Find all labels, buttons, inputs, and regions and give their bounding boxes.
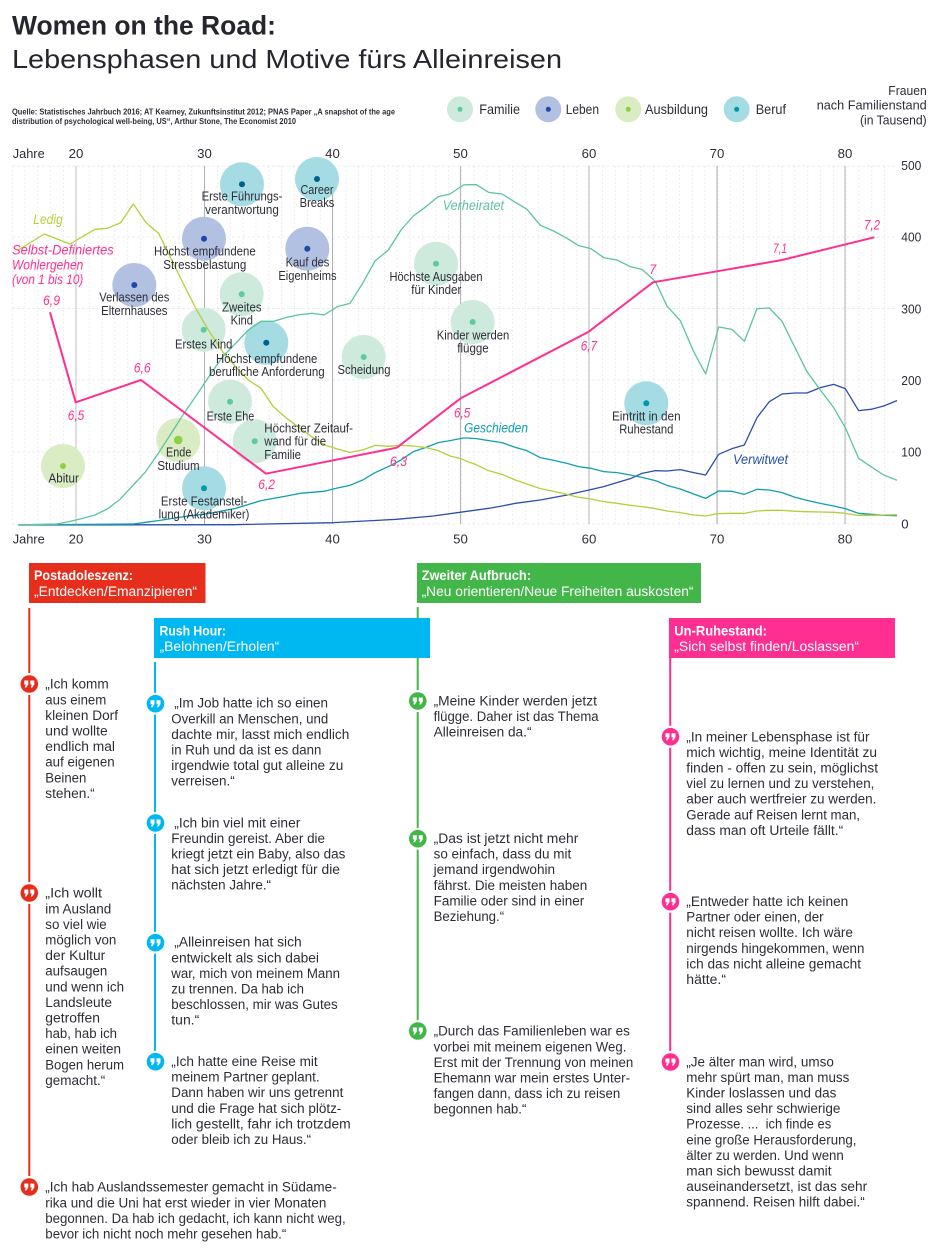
- quote pink 3: auseinandersetzt, ist das sehr: [686, 1179, 867, 1195]
- line: Ledig: [18, 204, 897, 516]
- quote blue 4: Dann haben wir uns getrennt: [171, 1085, 343, 1101]
- quote blue 1: in Ruh und da ist es dann: [171, 742, 321, 758]
- quote green 3: [434, 1024, 633, 1118]
- wellbeing values: 6,9: [43, 293, 60, 308]
- wellbeing values: [43, 217, 880, 492]
- milestone labels: Ruhestand: [619, 422, 673, 437]
- milestone labels: Höchst empfundene: [216, 351, 317, 366]
- quote red 2: getroffen: [45, 1010, 100, 1026]
- wellbeing values: 6,7: [581, 338, 597, 353]
- quote pink 2: hätte.“: [686, 972, 726, 988]
- milestone labels: Eintritt in den: [612, 409, 681, 424]
- quote red 2: [45, 886, 124, 1089]
- quote blue 3: [170, 935, 340, 1029]
- panel: Postadoleszenz heading: „Entdecken/Emanzipieren“: [34, 584, 197, 600]
- bottom age axis: 40: [325, 531, 340, 546]
- right axis title: (in Tausend): [860, 112, 927, 127]
- quote blue 3: war, mich von meinem Mann: [170, 966, 340, 982]
- panel: Postadoleszenz heading: [29, 563, 206, 603]
- quote blue 2: nächsten Jahre.“: [171, 878, 271, 894]
- quote red 1: [45, 677, 118, 802]
- quote green 3: vorbei mit meinem eigenen Weg.: [434, 1039, 626, 1055]
- quote red 2: hab, hab ich: [45, 1026, 117, 1042]
- right value axis: 100: [901, 445, 921, 460]
- series labels: Ledig: [33, 212, 63, 227]
- right value axis: 400: [901, 230, 921, 245]
- icon: quote blue 2: [144, 812, 166, 834]
- milestone labels: Erstes Kind: [175, 336, 232, 351]
- title: Women on the Road:: [12, 10, 276, 40]
- subtitle: Lebensphasen und Motive fürs Alleinreisen: [12, 44, 562, 74]
- quote pink 1: finden - offen zu sein, möglichst: [686, 760, 878, 776]
- milestone labels: Kind: [231, 313, 253, 328]
- wellbeing values: 7: [649, 262, 657, 277]
- bottom age axis: 20: [69, 531, 83, 546]
- quote blue 3: tun.“: [171, 1013, 200, 1029]
- top age axis: 20: [69, 146, 83, 161]
- top age axis: 50: [453, 146, 468, 161]
- legend: [447, 96, 786, 122]
- quote pink 3: spannend. Reisen hilft dabei.“: [686, 1195, 865, 1211]
- series labels: [33, 198, 789, 467]
- quote red 3: [45, 1180, 346, 1242]
- quote blue 4: oder bleib ich zu Haus.“: [171, 1132, 311, 1148]
- legend: Ausbildung: [645, 102, 708, 117]
- quote red 1: und wollte: [45, 724, 108, 740]
- milestone labels: Höchster Zeitauf-: [264, 421, 353, 436]
- quote red 2: Landsleute: [45, 995, 112, 1011]
- quote red 2: aufsaugen: [45, 964, 107, 980]
- milestone labels: Career: [300, 182, 334, 197]
- icon: quote blue 4: [144, 1051, 166, 1073]
- quote blue 3: beschlossen, mir was Gutes: [171, 997, 338, 1013]
- milestone labels: Erste Ehe: [207, 408, 254, 423]
- series labels: Verheiratet: [443, 198, 505, 213]
- wellbeing values: 6,6: [134, 360, 151, 375]
- quote pink 1: viel zu lernen und zu verstehen,: [686, 776, 874, 792]
- right value axis: 500: [901, 158, 921, 173]
- series labels: Geschieden: [464, 421, 528, 436]
- quote blue 4: und die Frage hat sich plötz-: [171, 1101, 342, 1117]
- panel: Un-Ruhestand heading: Un-Ruhestand:: [674, 622, 767, 638]
- quote pink 2: ich das nicht alleine gemacht: [686, 956, 861, 972]
- top age axis: 70: [710, 146, 724, 161]
- quote blue 1: [171, 696, 349, 790]
- quote red 2: einen weiten: [45, 1042, 121, 1058]
- quote pink 1: Gerade auf Reisen lernt man,: [686, 807, 860, 823]
- quote green 2: Beziehung.“: [434, 909, 504, 925]
- milestone labels: flügge: [457, 341, 489, 356]
- quote blue 2: [171, 815, 345, 894]
- panel: Zweiter Aufbruch heading: [417, 563, 701, 603]
- quote green 1: „Meine Kinder werden jetzt: [434, 693, 597, 709]
- quote pink 3: man sich bewusst damit: [686, 1164, 832, 1180]
- wellbeing label: [12, 243, 114, 287]
- quote blue 3: zu trennen. Da hab ich: [171, 982, 304, 998]
- quote red 3: „Ich hab Auslandssemester gemacht in Südame-: [45, 1180, 337, 1196]
- wellbeing values: 6,5: [68, 408, 85, 423]
- icon: quote green 3: [407, 1020, 429, 1042]
- icon: quote pink 3: [660, 1051, 682, 1073]
- quote red 2: „Ich wollt: [45, 886, 102, 902]
- right value axis: [901, 158, 921, 531]
- quote red 1: endlich mal: [45, 739, 115, 755]
- icon: quote blue 1: [144, 693, 166, 715]
- quote pink 3: eine große Herausforderung,: [686, 1132, 856, 1148]
- quote red 2: der Kultur: [45, 948, 106, 964]
- quote red 1: kleinen Dorf: [45, 708, 118, 724]
- icon: quote red 1: [18, 673, 40, 695]
- milestone labels: Familie: [264, 447, 301, 462]
- icon: quote red 2: [18, 882, 40, 904]
- wellbeing values: 7,2: [864, 217, 880, 232]
- wellbeing label: (von 1 bis 10): [12, 272, 83, 287]
- quote blue 4: „Ich hatte eine Reise mit: [171, 1054, 318, 1070]
- quote pink 3: Prozesse. ... ich finde es: [686, 1117, 831, 1133]
- bottom age axis: 50: [453, 531, 468, 546]
- panel: Rush Hour heading: „Belohnen/Erholen“: [160, 639, 280, 655]
- panel: Rush Hour heading: Rush Hour:: [160, 622, 226, 638]
- panel: Postadoleszenz heading: Postadoleszenz:: [34, 567, 133, 583]
- line: Verwitwet: [18, 384, 897, 525]
- icon: quote green 2: [407, 828, 429, 850]
- quote green 1: [434, 693, 599, 740]
- milestone labels: Scheidung: [338, 362, 390, 377]
- timeline lines: [29, 607, 670, 1187]
- milestone labels: Studium: [157, 458, 200, 473]
- wellbeing values: 7,1: [773, 241, 787, 256]
- quote green 2: Familie oder sind in einer: [434, 893, 584, 909]
- icon: quote pink 2: [660, 891, 682, 913]
- quote blue 4: meinem Partner geplant.: [171, 1070, 320, 1086]
- milestone labels: Erste Festanstel-: [161, 494, 247, 509]
- quote blue 2: „Ich bin viel mit einer: [174, 815, 301, 831]
- panel: Un-Ruhestand heading: [669, 618, 895, 658]
- quote green 3: Ehemann war mein erstes Unter-: [434, 1070, 630, 1086]
- quote blue 2: hat sich jetzt erledigt für die: [171, 862, 340, 878]
- quote green 2: fährst. Die meisten haben: [434, 878, 587, 894]
- quote red 2: im Ausland: [45, 901, 111, 917]
- panel: Zweiter Aufbruch heading: Zweiter Aufbruch:: [422, 567, 531, 583]
- quote pink 1: mich wichtig, meine Identität zu: [686, 745, 877, 761]
- quote green 2: [433, 831, 587, 925]
- milestone labels: Kauf des: [286, 255, 330, 270]
- source note: [12, 106, 395, 126]
- quote red 1: „Ich komm: [45, 677, 109, 693]
- quote green 2: so einfach, dass du mit: [434, 847, 571, 863]
- line: Wohlergehen: [50, 237, 874, 474]
- quote blue 3: entwickelt als sich dabei: [171, 950, 319, 966]
- quote blue 1: dachte mir, lasst mich endlich: [171, 727, 349, 743]
- quote blue 3: „Alleinreisen hat sich: [174, 935, 302, 951]
- right value axis: 0: [901, 516, 909, 531]
- line: Verheiratet: [18, 185, 897, 525]
- quote red 1: Beinen: [45, 770, 86, 786]
- quote blue 2: kriegt jetzt ein Baby, also das: [171, 846, 345, 862]
- milestone labels: Breaks: [300, 195, 335, 210]
- bottom age axis: 60: [582, 531, 596, 546]
- quote blue 2: Freundin gereist. Aber die: [171, 831, 325, 847]
- top age axis: 60: [582, 146, 596, 161]
- quote pink 2: „Entweder hatte ich keinen: [686, 894, 848, 910]
- bottom age axis: 30: [197, 531, 212, 546]
- milestone labels: Kinder werden: [437, 327, 509, 342]
- top age axis: [13, 146, 852, 161]
- milestone labels: Abitur: [49, 470, 79, 485]
- bottom age axis: [13, 531, 852, 546]
- source note: Quelle: Statistisches Jahrbuch 2016; AT Kearney, Zukunftsinstitut 2012; PNAS Paper „A snapshot of the age: [12, 106, 395, 116]
- quote red 3: bevor ich nicht noch mehr gesehen hab.“: [45, 1226, 287, 1242]
- quote pink 3: [686, 1054, 867, 1211]
- quote pink 1: [686, 729, 878, 839]
- quote green 1: Alleinreisen da.“: [434, 724, 532, 740]
- quote green 3: Erst mit der Trennung von meinen: [434, 1055, 633, 1071]
- legend: Leben: [566, 102, 599, 117]
- milestone circles: [41, 157, 668, 510]
- milestone labels: Höchst empfundene: [154, 244, 256, 259]
- quote blue 1: verreisen.“: [171, 774, 235, 790]
- quote red 2: so viel wie: [45, 917, 107, 933]
- quote pink 2: nicht reisen wollte. Ich wäre: [686, 925, 853, 941]
- quote red 2: möglich von: [45, 932, 116, 948]
- quote green 3: begonnen hab.“: [434, 1102, 527, 1118]
- milestone labels: Eigenheims: [278, 268, 337, 283]
- icon: quote blue 3: [144, 932, 166, 954]
- bottom age axis: 80: [838, 531, 852, 546]
- quote pink 3: älter zu werden. Und wenn: [686, 1148, 844, 1164]
- quote red 1: auf eigenen: [45, 755, 115, 771]
- icon: quote pink 1: [660, 726, 682, 748]
- quote red 1: aus einem: [45, 692, 106, 708]
- quote green 2: jemand irgendwohin: [433, 862, 555, 878]
- quote green 1: flügge. Daher ist das Thema: [434, 709, 599, 725]
- top age axis: 30: [197, 146, 212, 161]
- milestone labels: Erste Führungs-: [202, 189, 282, 204]
- milestone labels: verantwortung: [205, 202, 279, 217]
- icon: quote red 3: [18, 1176, 40, 1198]
- top age axis: 80: [838, 146, 852, 161]
- right value axis: 300: [901, 301, 921, 316]
- line: Geschieden: [18, 438, 897, 525]
- quote pink 1: dass man oft Urteile fällt.“: [686, 823, 843, 839]
- quote red 3: rika und die Uni hat erst wieder in vier Monaten: [45, 1195, 326, 1211]
- milestone labels: lung (Akademiker): [159, 507, 249, 522]
- quote pink 2: nirgends hingekommen, wenn: [686, 941, 864, 957]
- panel: Rush Hour heading: [154, 618, 430, 658]
- milestone labels: für Kinder: [411, 282, 462, 297]
- quote blue 1: „Im Job hatte ich so einen: [174, 696, 328, 712]
- quote pink 3: „Je älter man wird, umso: [686, 1054, 834, 1070]
- right value axis: 200: [901, 373, 921, 388]
- quote pink 2: Partner oder einen, der: [686, 910, 824, 926]
- wellbeing label: Wohlergehen: [12, 257, 83, 272]
- quote blue 1: irgendwie total gut alleine zu: [171, 758, 343, 774]
- wellbeing values: 6,3: [390, 454, 407, 469]
- quote pink 3: mehr spürt man, man muss: [686, 1070, 849, 1086]
- wellbeing label: Selbst-Definiertes: [12, 243, 114, 258]
- quote blue 4: [171, 1054, 351, 1148]
- quote red 2: gemacht.“: [45, 1073, 106, 1089]
- quote red 2: Bogen herum: [45, 1057, 124, 1073]
- quote blue 4: lich gestellt, fahr ich trotzdem: [171, 1116, 351, 1132]
- panel: Un-Ruhestand heading: „Sich selbst finden/Loslassen“: [674, 639, 859, 655]
- panel: Zweiter Aufbruch heading: „Neu orientieren/Neue Freiheiten auskosten“: [422, 584, 694, 600]
- legend: Beruf: [756, 102, 786, 117]
- milestone labels: berufliche Anforderung: [209, 364, 325, 379]
- milestone labels: wand für die: [263, 434, 326, 449]
- wellbeing values: 6,2: [258, 477, 275, 492]
- milestone dots: [60, 176, 649, 491]
- wellbeing values: 6,5: [454, 405, 471, 420]
- milestone labels: Elternhauses: [101, 303, 168, 318]
- bottom age axis: Jahre: [13, 531, 45, 546]
- quote pink 1: aber auch wertfreier zu werden.: [686, 792, 876, 808]
- series labels: Verwitwet: [733, 452, 789, 467]
- milestone labels: Zweites: [222, 299, 262, 314]
- right axis title: Frauen: [888, 83, 927, 98]
- source note: distribution of psychological well-being, US“, Arthur Stone, The Economist 2010: [12, 116, 296, 126]
- quote red 2: und wenn ich: [45, 979, 124, 995]
- top age axis: 40: [325, 146, 340, 161]
- milestone labels: Stressbelastung: [163, 257, 246, 272]
- right axis title: nach Familienstand: [817, 98, 927, 113]
- quote red 3: begonnen. Da hab ich gedacht, ich kann nicht weg,: [45, 1211, 346, 1227]
- quote pink 1: „In meiner Lebensphase ist für: [686, 729, 870, 745]
- right axis title: [817, 83, 927, 127]
- quote pink 2: [686, 894, 864, 988]
- milestone labels: Verlassen des: [99, 290, 170, 305]
- milestone labels: [49, 182, 681, 522]
- legend: Familie: [479, 102, 520, 117]
- quote pink 3: sind alles sehr schwierige: [686, 1101, 841, 1117]
- quote green 3: „Durch das Familienleben war es: [434, 1024, 630, 1040]
- quote red 1: stehen.“: [45, 786, 95, 802]
- bottom age axis: 70: [710, 531, 724, 546]
- quote blue 1: Overkill an Menschen, und: [171, 711, 328, 727]
- milestone labels: Höchste Ausgaben: [390, 269, 482, 284]
- milestone labels: Ende: [166, 445, 191, 460]
- quote pink 3: Kinder loslassen und das: [686, 1086, 836, 1102]
- top age axis: Jahre: [13, 146, 45, 161]
- quote green 2: „Das ist jetzt nicht mehr: [434, 831, 579, 847]
- icon: quote green 1: [407, 690, 429, 712]
- quote green 3: fangen dann, dass ich zu reisen: [434, 1086, 620, 1102]
